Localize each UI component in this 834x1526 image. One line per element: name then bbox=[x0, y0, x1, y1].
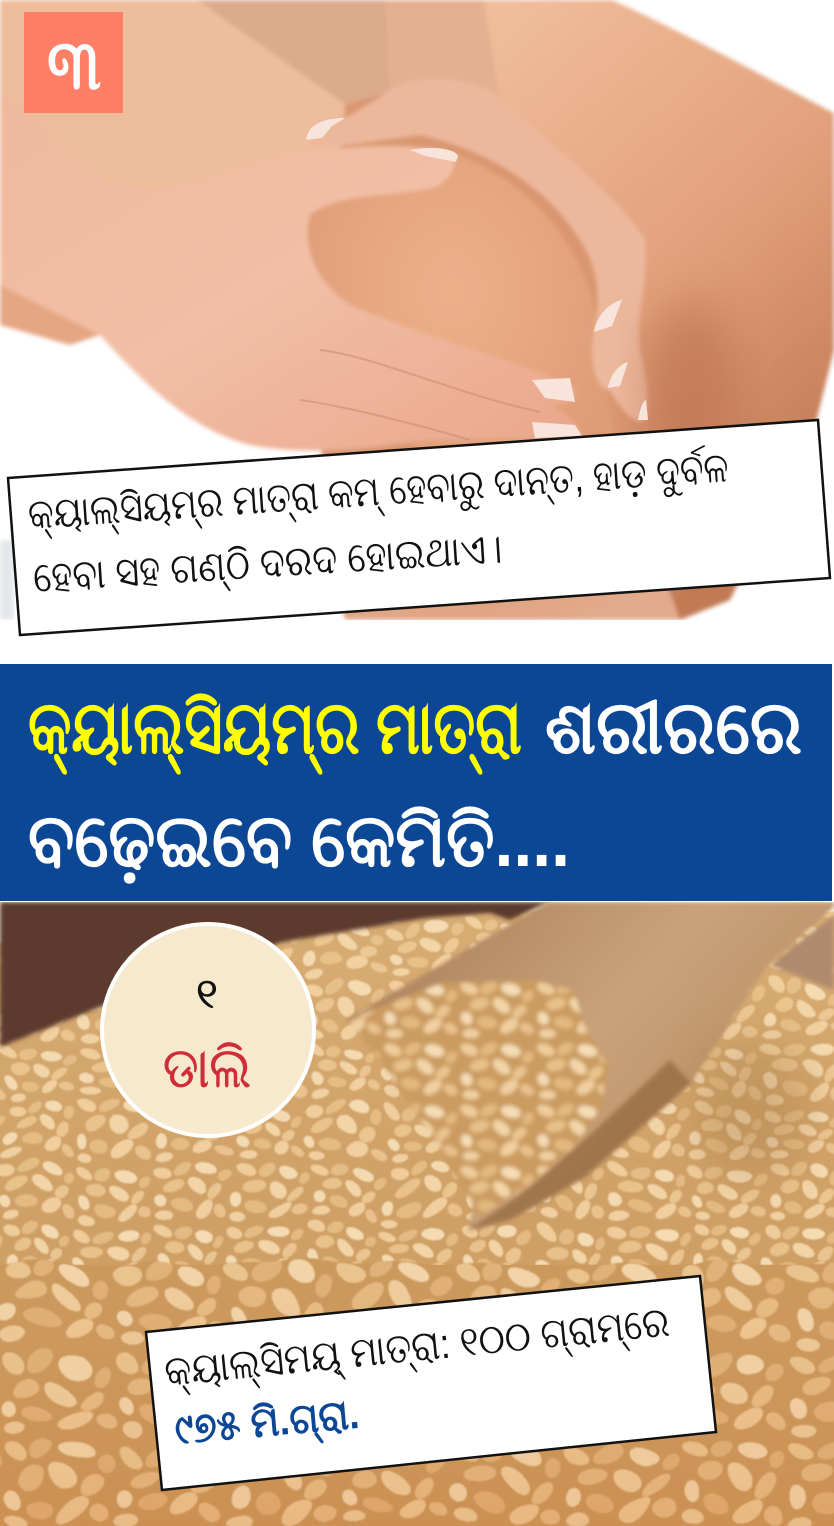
photo: sesame seeds in bowl with spoon bbox=[0, 902, 834, 1526]
photo: hands holding knee bbox=[0, 0, 834, 620]
circle badge: pulse one bbox=[102, 924, 314, 1136]
seeds in spoon bbox=[346, 980, 609, 1217]
number one: ୧ bbox=[196, 970, 218, 1017]
badge: number three: ୩ bbox=[46, 26, 102, 104]
heading yellow words: କ୍ୟାଲ୍ସିୟମ୍‌ର ମାତ୍ରା bbox=[28, 686, 522, 775]
amount line one: କ୍ୟାଲ୍ସିମୟ୍ ମାତ୍ରା: ୧୦୦ ଗ୍ରାମ୍‌ରେ bbox=[162, 1298, 672, 1398]
wooden spoon bbox=[346, 902, 834, 1230]
amount line two: ୯୭୫ ମି.ଗ୍ରା. bbox=[173, 1390, 361, 1457]
badge: number three bbox=[24, 12, 123, 113]
nails bbox=[306, 118, 648, 438]
text box: calcium amount bbox=[146, 1276, 716, 1490]
label: dal: ଡାଲି bbox=[163, 1036, 251, 1099]
heading banner bbox=[0, 664, 832, 901]
bowl rim bbox=[0, 902, 550, 1047]
heading white word: ଶରୀରରେ bbox=[545, 686, 802, 769]
text box: calcium deficiency note bbox=[8, 420, 830, 635]
note line two: ହେବା ସହ ଗଣ୍ଠି ଦରଦ ହୋଇଥାଏ। bbox=[32, 525, 504, 604]
heading line two: ବଢ଼େଇବେ କେମିତି.... bbox=[28, 799, 570, 885]
